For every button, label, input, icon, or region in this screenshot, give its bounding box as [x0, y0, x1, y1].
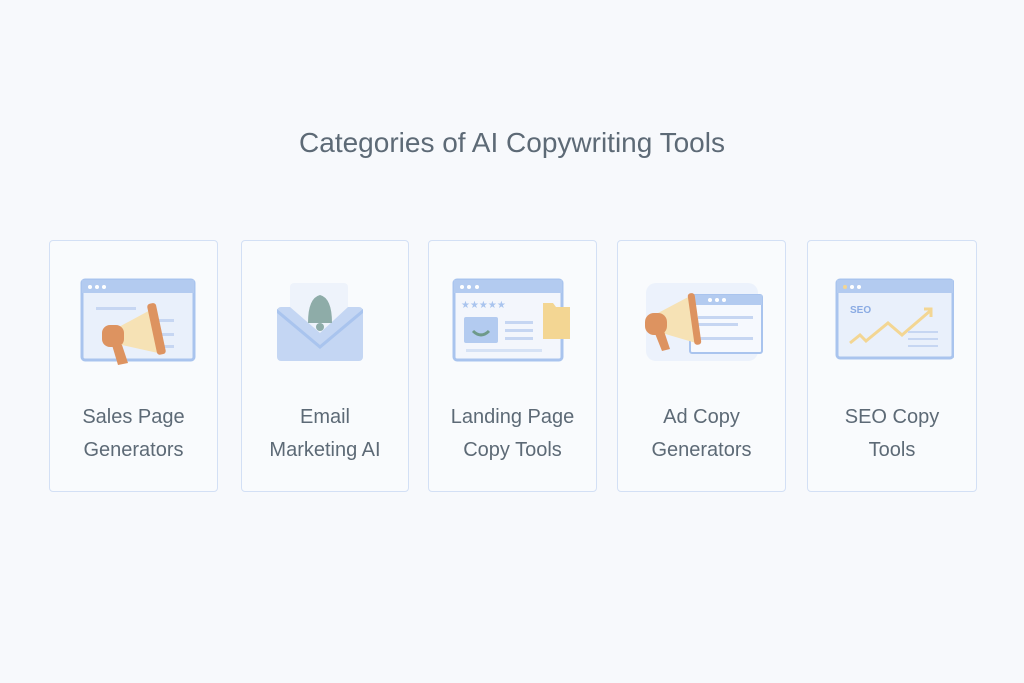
- label: Tools: [869, 439, 915, 461]
- icon: browser with megaphone: [80, 278, 196, 365]
- label: Marketing AI: [269, 439, 381, 461]
- icon: megaphone with browser: [645, 283, 763, 361]
- label: [451, 406, 574, 461]
- panel: SEO copy tools: [807, 240, 977, 492]
- icon: envelope with bell: [277, 283, 363, 361]
- title: Categories of AI Copywriting Tools: [299, 127, 725, 158]
- label: Email: [300, 406, 350, 428]
- icon: browser with stars and folder: [452, 278, 570, 362]
- label: Ad Copy: [663, 406, 740, 428]
- label: Sales Page: [82, 406, 185, 428]
- label: Generators: [651, 439, 752, 461]
- label: Generators: [83, 439, 184, 461]
- panel: ad copy generators: [617, 240, 786, 492]
- label: [651, 406, 752, 461]
- panel: email marketing AI: [241, 240, 409, 492]
- icon: browser with stars and folder: ★★★★★: [460, 300, 505, 311]
- label: [82, 406, 185, 461]
- label: [269, 406, 381, 461]
- panel: sales page generators: [49, 240, 218, 492]
- label: [845, 406, 940, 461]
- label: Copy Tools: [463, 439, 562, 461]
- icon: SEO browser chart: SEO: [850, 305, 871, 316]
- panel: landing page copy tools: [428, 240, 597, 492]
- icon: SEO browser chart: [836, 278, 954, 360]
- label: SEO Copy: [845, 406, 939, 428]
- label: Landing Page: [451, 406, 574, 428]
